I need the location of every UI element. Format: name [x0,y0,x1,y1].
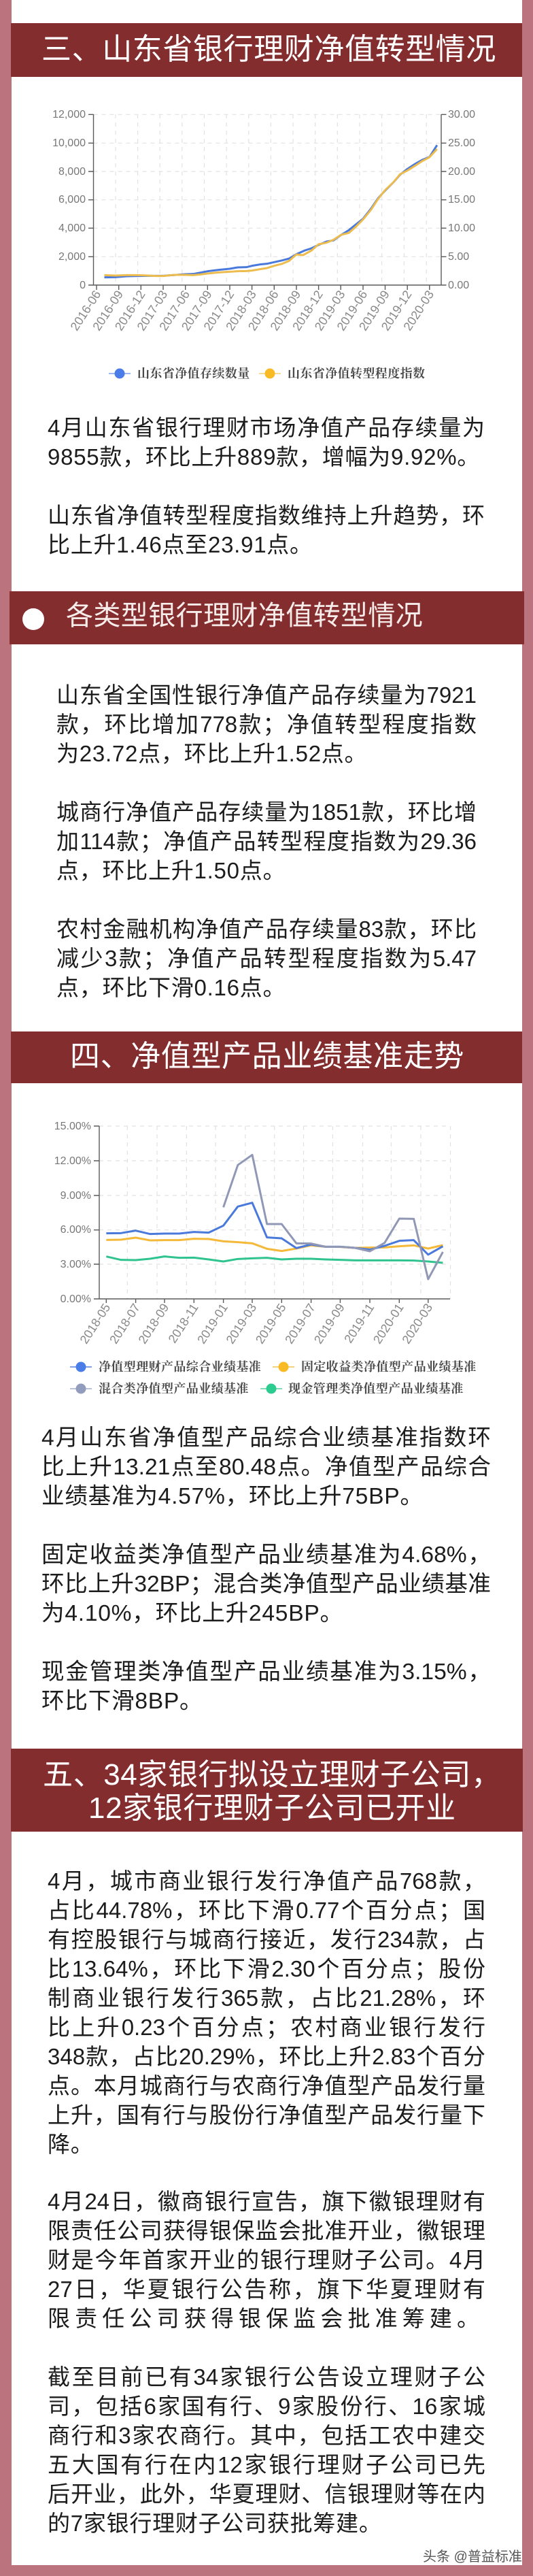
x axis labels: 2019-05 [253,1301,289,1347]
line chart: performance benchmarks [54,1121,477,1397]
line chart: Shandong net value products and transition index [52,109,475,382]
text: rural financial institutions: 点，环比下滑0.16点。 [56,975,286,1000]
x axis labels: 2018-12 [290,288,326,333]
x axis labels: 2019-03 [312,288,348,333]
legend: 固定收益类净值型产品业绩基准 [301,1357,477,1375]
text: issuance by bank type: 348款，占比20.29%，环比上升2.83个百分 [48,2044,485,2069]
x axis labels: 2017-03 [135,288,170,333]
y axis labels: 0.00% [61,1293,91,1305]
right axis labels: 25.00 [448,137,475,149]
x axis labels: 2019-06 [334,288,370,333]
legend: 山东省净值存续数量 [137,364,250,382]
heading: section four [11,1031,522,1083]
x axis labels: 2019-07 [282,1301,318,1347]
text: issuance by bank type: 上升，国有行与股份行净值型产品发行量下 [48,2102,485,2128]
right axis labels [448,109,475,291]
right axis labels: 20.00 [448,166,475,178]
text: subsidiaries overview: 商行和3家农商行。其中，包括工农中建交 [48,2423,485,2448]
x axis labels: 2020-01 [371,1301,407,1347]
page border: left [0,0,12,2576]
x axis labels: 2018-09 [268,288,303,333]
right axis labels: 0.00 [448,280,469,291]
x axis labels: 2017-12 [201,288,237,333]
right axis labels: 10.00 [448,222,475,234]
x axis labels: 2019-09 [356,288,392,333]
text: fixed income and mixed: 固定收益类净值型产品业绩基准为4.68%， [41,1542,491,1568]
text: city commercial banks: 点，环比上升1.50点。 [56,858,286,883]
x axis labels [68,288,436,333]
heading: section three: 三、山东省银行理财净值转型情况 [41,33,496,66]
text: issuance by bank type: 占比44.78%，环比下滑0.77个百分点；国 [48,1898,485,1923]
x axis labels: 2018-05 [78,1301,113,1347]
left axis labels: 10,000 [52,137,86,149]
legend [109,364,425,382]
text: fixed income and mixed [41,1542,491,1626]
text: subsidiaries overview: 五大国有行在内12家银行理财子公司已先 [48,2452,485,2477]
text: issuance by bank type: 4月，城市商业银行发行净值产品768款， [48,1868,485,1894]
text: market summary [48,415,485,469]
legend: 净值型理财产品综合业绩基准 [99,1357,261,1375]
text: rural financial institutions [56,917,477,1000]
left axis labels: 2,000 [58,251,86,263]
axes [94,1126,450,1303]
text: national banks: 款，环比增加778款；净值转型程度指数 [56,712,477,737]
x axis labels: 2017-09 [179,288,215,333]
legend: 山东省净值转型程度指数 [288,364,425,382]
x axis labels: 2018-11 [166,1301,201,1345]
text: issuance by bank type: 制商业银行发行365款，占比21.28%，环 [48,1985,485,2011]
left axis labels: 8,000 [58,166,86,178]
text: Huishang and Huaxia news: 限责任公司获得银保监会批准开业，徽银理 [48,2218,485,2243]
text: composite benchmark: 业绩基准为4.57%，环比上升75BP。 [41,1484,424,1509]
text: market summary: 9855款，环比上升889款，增幅为9.92%。 [48,444,480,469]
text: city commercial banks [56,799,477,883]
text: Huishang and Huaxia news [48,2189,485,2331]
y axis labels [54,1121,91,1305]
page border: right [522,0,533,2576]
left axis labels: 4,000 [58,222,86,234]
legend: 混合类净值型产品业绩基准 [99,1379,249,1397]
x axis labels: 2018-07 [107,1301,143,1347]
text: issuance by bank type: 有控股银行与城商行接近，发行234款，占 [48,1927,485,1952]
x axis labels: 2018-06 [245,288,281,333]
text: composite benchmark: 比上升13.21点至80.48点。净值型产品综合 [41,1455,491,1480]
x axis labels: 2016-06 [68,288,103,333]
text: national banks: 山东省全国性银行净值产品存续量为7921 [56,682,477,708]
text: subsidiaries overview [48,2364,485,2536]
text: city commercial banks: 加114款；净值产品转型程度指数为29.36 [56,829,477,854]
text: Huishang and Huaxia news: 限责任公司获得银保监会批准筹建。 [48,2306,479,2331]
data series [104,145,437,278]
data series [106,1155,443,1279]
x axis labels [78,1301,435,1347]
x axis labels: 2017-06 [156,288,192,333]
text: composite benchmark [41,1425,491,1509]
text: transition index [48,503,485,557]
text: Huishang and Huaxia news: 财是今年首家开业的银行理财子公司。4月 [48,2247,485,2273]
text: subsidiaries overview: 的7家银行理财子公司获批筹建。 [48,2511,382,2536]
text: fixed income and mixed: 环比上升32BP；混合类净值型产品业绩基准 [41,1572,491,1597]
text: cash management: 环比下滑8BP。 [41,1689,203,1714]
text: national banks: 为23.72点，环比上升1.52点。 [56,741,367,766]
y axis labels: 15.00% [54,1121,91,1132]
left axis labels: 12,000 [52,109,86,120]
legend [70,1357,477,1397]
x axis labels: 2020-03 [400,288,436,333]
y axis labels: 9.00% [61,1190,91,1202]
heading: section three [11,23,522,77]
heading: bank types [10,591,524,644]
text: issuance by bank type: 点。本月城商行与农商行净值型产品发行量 [48,2073,485,2098]
y axis labels: 3.00% [61,1259,91,1270]
text: national banks [56,682,477,766]
right axis labels: 5.00 [448,251,469,263]
y axis labels: 12.00% [54,1155,91,1167]
heading: section five [11,1749,523,1832]
heading: section five: 五、34家银行拟设立理财子公司， [43,1758,502,1791]
legend: 现金管理类净值型产品业绩基准 [288,1379,464,1397]
x axis labels: 2019-03 [224,1301,259,1347]
right axis labels: 30.00 [448,109,475,120]
text: transition index: 比上升1.46点至23.91点。 [48,532,313,557]
heading: section four: 四、净值型产品业绩基准走势 [70,1040,464,1073]
watermark: 头条 @普益标准 [423,2549,522,2564]
icon: white dot [22,608,44,630]
page border: bottom [0,2565,533,2576]
text: issuance by bank type: 降。 [48,2132,94,2157]
text: issuance by bank type [48,1868,485,2157]
x axis labels: 2019-01 [194,1301,230,1347]
left axis labels: 0 [80,280,86,291]
text: Huishang and Huaxia news: 4月24日，徽商银行宣告，旗下徽银理财有 [48,2189,485,2214]
x axis labels: 2016-12 [112,288,148,333]
text: market summary: 4月山东省银行理财市场净值产品存续量为 [48,415,485,440]
heading: bank types: 各类型银行理财净值转型情况 [66,601,423,631]
heading: section five: 12家银行理财子公司已开业 [88,1791,456,1825]
x axis labels: 2016-09 [90,288,126,333]
x axis labels: 2018-03 [223,288,259,333]
text: composite benchmark: 4月山东省净值型产品综合业绩基准指数环 [41,1425,491,1451]
y axis labels: 6.00% [61,1224,91,1236]
right axis labels: 15.00 [448,194,475,205]
text: cash management [41,1659,491,1714]
left axis labels [52,109,86,291]
text: subsidiaries overview: 后开业，此外，华夏理财、信银理财等在内 [48,2481,485,2507]
text: Huishang and Huaxia news: 27日，华夏银行公告称，旗下华夏理财有 [48,2277,485,2302]
text: subsidiaries overview: 截至目前已有34家银行公告设立理财子公 [48,2364,485,2390]
text: rural financial institutions: 农村金融机构净值产品存续量83款，环比 [56,917,477,942]
text: cash management: 现金管理类净值型产品业绩基准为3.15%， [41,1659,491,1685]
x axis labels: 2019-11 [341,1301,377,1345]
axes [88,114,446,290]
x axis labels: 2019-12 [379,288,415,333]
text: rural financial institutions: 减少3款；净值产品转型程度指数为5.47 [56,946,477,971]
text: fixed income and mixed: 为4.10%，环比上升245BP。 [41,1601,343,1626]
x axis labels: 2019-09 [311,1301,347,1347]
x axis labels: 2020-03 [399,1301,435,1347]
text: issuance by bank type: 比13.64%，环比下滑2.30个百分点；股份 [48,1956,485,1981]
text: transition index: 山东省净值转型程度指数维持上升趋势，环 [48,503,485,528]
text: subsidiaries overview: 司，包括6家国有行、9家股份行、16家城 [48,2394,485,2419]
text: city commercial banks: 城商行净值产品存续量为1851款，环比增 [56,799,477,825]
text: issuance by bank type: 比上升0.23个百分点；农村商业银行发行 [48,2015,485,2040]
left axis labels: 6,000 [58,194,86,205]
x axis labels: 2018-09 [136,1301,171,1347]
